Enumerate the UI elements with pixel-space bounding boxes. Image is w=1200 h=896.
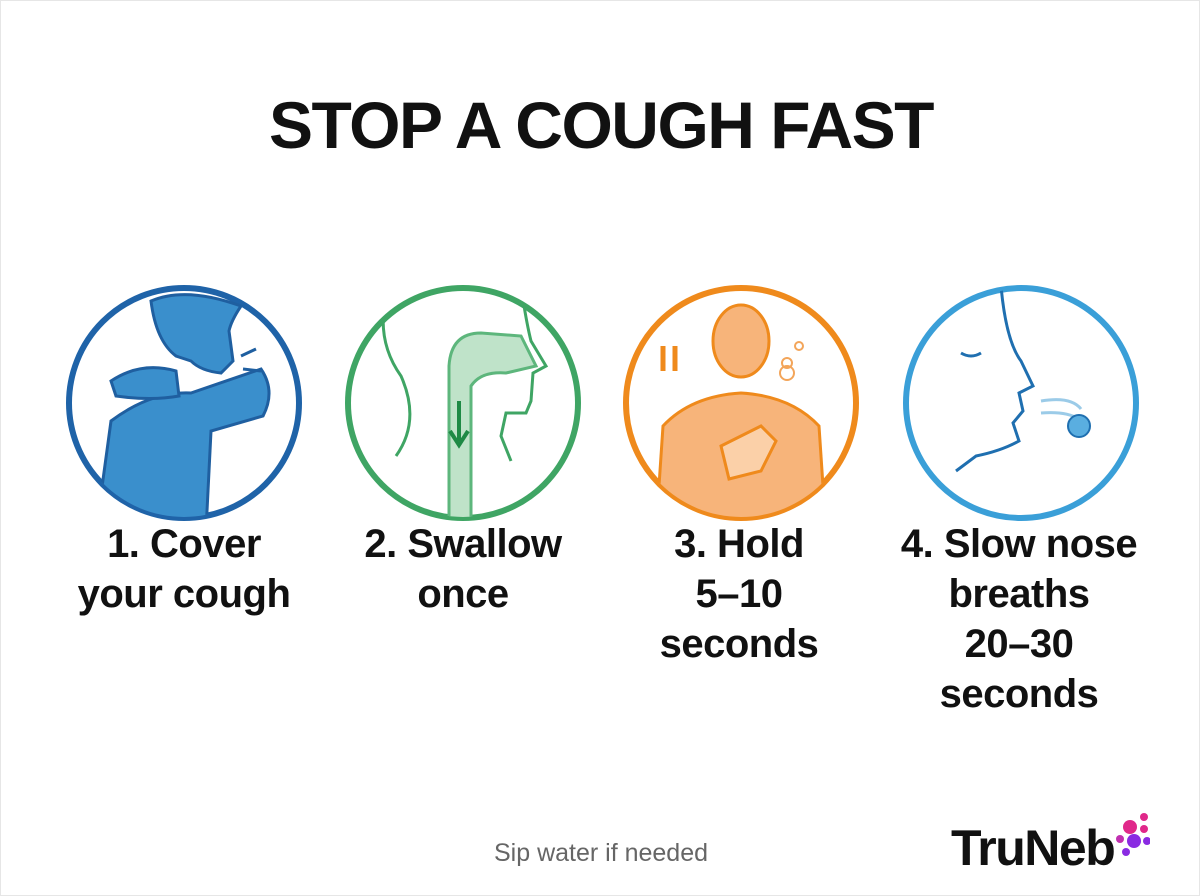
icon: swallow xyxy=(348,286,578,531)
icon: cover cough xyxy=(69,288,299,531)
label 4: 4. Slow nose xyxy=(901,522,1137,566)
label 2: 2. Swallow xyxy=(364,522,562,566)
logo: TruNeb xyxy=(951,820,1114,876)
label 2 xyxy=(364,522,562,616)
icon: hold xyxy=(626,288,856,531)
label 1: 1. Cover xyxy=(107,522,261,566)
label 2: once xyxy=(417,572,509,616)
title: STOP A COUGH FAST xyxy=(269,88,933,162)
label 4: seconds xyxy=(940,672,1098,716)
label 3: 3. Hold xyxy=(674,522,804,566)
icon: nose breathing xyxy=(906,286,1136,518)
footer note: Sip water if needed xyxy=(494,839,708,867)
label 3 xyxy=(660,522,818,666)
label 1 xyxy=(78,522,290,616)
label 4: 20–30 xyxy=(965,622,1073,666)
icons row xyxy=(66,285,1139,521)
label 3: seconds xyxy=(660,622,818,666)
label 4: breaths xyxy=(948,572,1090,616)
label 3: 5–10 xyxy=(696,572,782,616)
label 1: your cough xyxy=(78,572,290,616)
label 4 xyxy=(901,522,1137,716)
